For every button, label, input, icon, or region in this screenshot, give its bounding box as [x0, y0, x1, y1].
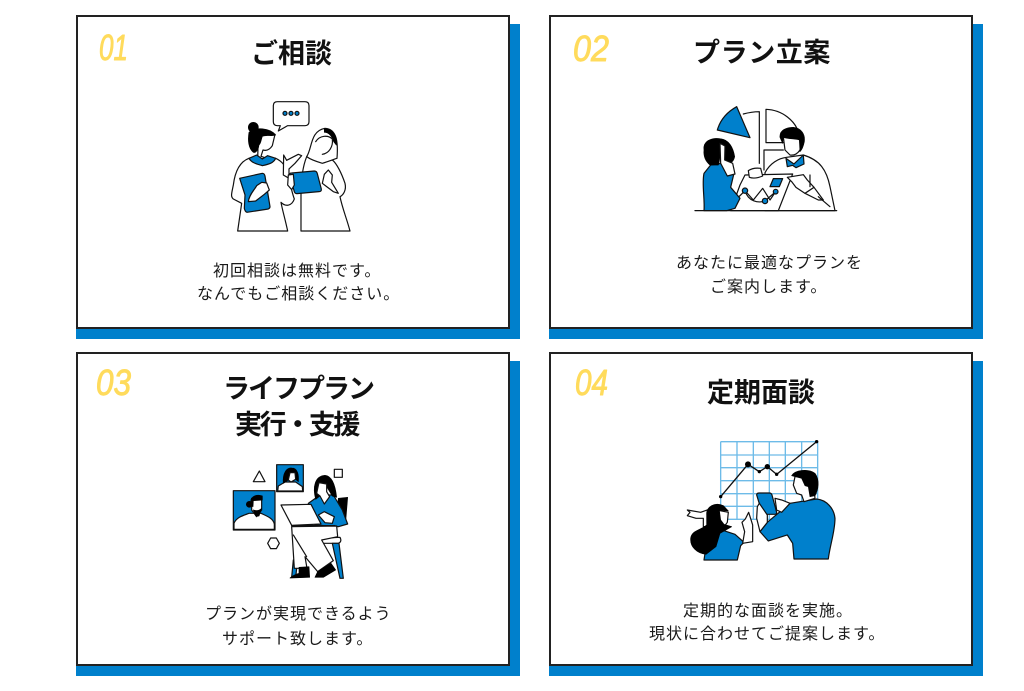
body text: planning: ご案内します。 — [710, 278, 827, 296]
heading: life plan execution and support — [223, 374, 374, 440]
heading: life plan execution and support: ライフプラン — [223, 374, 374, 404]
icon: two women talking with tablets — [232, 102, 350, 231]
heading: life plan execution and support: 実行・支援 — [235, 410, 360, 440]
body text: regular meetings: 現状に合わせてご提案します。 — [649, 625, 885, 643]
step number 01: 01 — [99, 27, 128, 68]
body text: planning: あなたに最適なプランを — [676, 254, 863, 272]
heading: planning: プラン立案 — [693, 38, 831, 68]
heading: consultation: ご相談 — [251, 38, 332, 69]
step number 04: 04 — [575, 362, 608, 403]
step number 02: 02 — [573, 28, 609, 69]
body text: consultation: 初回相談は無料です。 — [213, 262, 381, 280]
panel: step 02 planning — [549, 16, 983, 339]
body text: consultation: なんでもご相談ください。 — [197, 285, 400, 303]
heading: regular meetings: 定期面談 — [707, 378, 815, 408]
body text: planning — [676, 254, 863, 296]
panel: step 03 execution and support — [76, 353, 520, 676]
body text: consultation — [197, 262, 400, 303]
line chart grid — [719, 440, 818, 519]
step number 03: 03 — [96, 362, 131, 403]
panel: step 04 regular meetings — [549, 353, 983, 676]
body text: execution and support: サポート致します。 — [222, 630, 373, 648]
body text: execution and support: プランが実現できるよう — [205, 605, 392, 623]
icon: woman at laptop with video call — [233, 465, 348, 578]
body text: regular meetings: 定期的な面談を実施。 — [683, 602, 853, 620]
panel: step 01 consultation — [76, 16, 520, 339]
icon: two people reviewing growth chart — [687, 440, 835, 560]
body text: regular meetings — [649, 602, 885, 643]
body text: execution and support — [205, 605, 392, 648]
icon: advisor and client with pie chart — [695, 107, 837, 211]
